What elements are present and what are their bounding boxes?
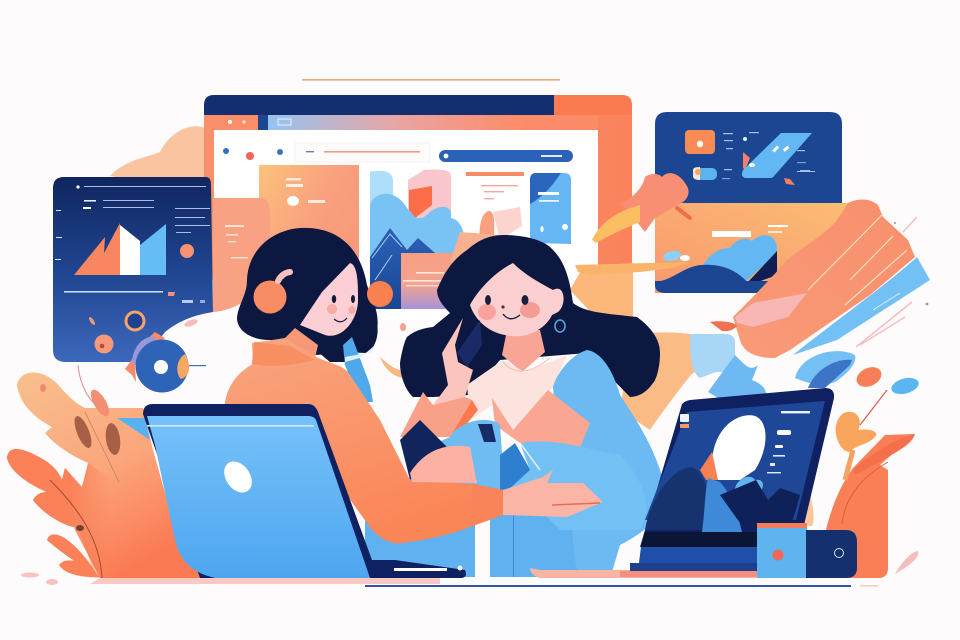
monitor title bar: navy [204, 95, 554, 115]
orange leaf over monitor [620, 173, 689, 232]
panel: left dark dashboard [53, 177, 213, 362]
blue jacket [553, 350, 667, 577]
avatar on screen [712, 415, 766, 480]
left laptop [143, 404, 466, 578]
neck [285, 328, 318, 358]
pale shirt [467, 355, 567, 430]
left sleeve [400, 392, 472, 437]
background blob: peach behind right girl [620, 332, 735, 430]
hill chart [703, 235, 777, 282]
small pink dot and peach arc [380, 323, 406, 378]
small plant [450, 207, 522, 262]
brush swoosh [710, 199, 930, 358]
icon: donut [125, 318, 206, 392]
hair [400, 235, 660, 397]
person: right girl [400, 235, 667, 577]
small thin leaf [47, 534, 98, 576]
center blue shirt area [405, 420, 505, 495]
blue header pill [439, 150, 573, 162]
left leaf solid tip [7, 449, 70, 526]
keyboard band [641, 532, 760, 547]
blue card [530, 173, 571, 244]
lanyard [343, 337, 373, 402]
plant: left leaves [7, 365, 210, 585]
base [637, 547, 760, 578]
bottom blue line [365, 585, 851, 587]
area chart [370, 170, 471, 310]
address bar [259, 115, 598, 130]
phone [457, 320, 482, 367]
person: left girl [225, 228, 603, 543]
mountain chart [74, 223, 166, 275]
bottom leaf [59, 560, 100, 577]
pink dot [94, 334, 114, 354]
toolbar dots [223, 148, 229, 154]
orange oval leaf [853, 363, 885, 391]
ring icon [126, 312, 144, 330]
center blue box [365, 515, 475, 577]
monitor body [204, 115, 632, 325]
dark blue triangle [500, 443, 540, 490]
hair back [237, 228, 378, 355]
monitor peach side panel [213, 198, 270, 312]
background cloud blob [110, 126, 215, 190]
monitor white screen [214, 130, 598, 320]
orange card [259, 165, 359, 280]
face [470, 263, 564, 336]
raised hand [433, 318, 473, 405]
upper peach leaf and body [17, 372, 210, 578]
face [300, 263, 358, 336]
navy bar [478, 424, 496, 442]
yellow panel behind hair [570, 263, 633, 322]
peach folder [492, 390, 590, 470]
sweater [225, 338, 503, 543]
white mask under left panel [170, 280, 300, 365]
text lines [466, 172, 524, 176]
toolbar search [295, 143, 430, 162]
blue splash shapes [795, 351, 855, 385]
lower orange leaf [7, 449, 112, 578]
plant: right leaves [800, 375, 920, 578]
monitor title bar: orange [554, 95, 632, 115]
blue forearm [508, 441, 646, 530]
bottom peach strip [90, 578, 440, 584]
main monitor [204, 95, 632, 325]
dark panel in hand [400, 420, 447, 480]
right laptop [530, 388, 834, 578]
hair bun [254, 280, 286, 314]
orange ornament [367, 281, 393, 307]
panel: right mid card [655, 203, 850, 293]
top accent line [302, 79, 560, 81]
panel: right top dashboard [655, 112, 842, 203]
hair clip [278, 272, 290, 281]
small device [757, 523, 857, 578]
hair lower part [318, 322, 378, 362]
blue band [793, 257, 930, 355]
hands [410, 446, 477, 483]
neck [502, 330, 545, 372]
